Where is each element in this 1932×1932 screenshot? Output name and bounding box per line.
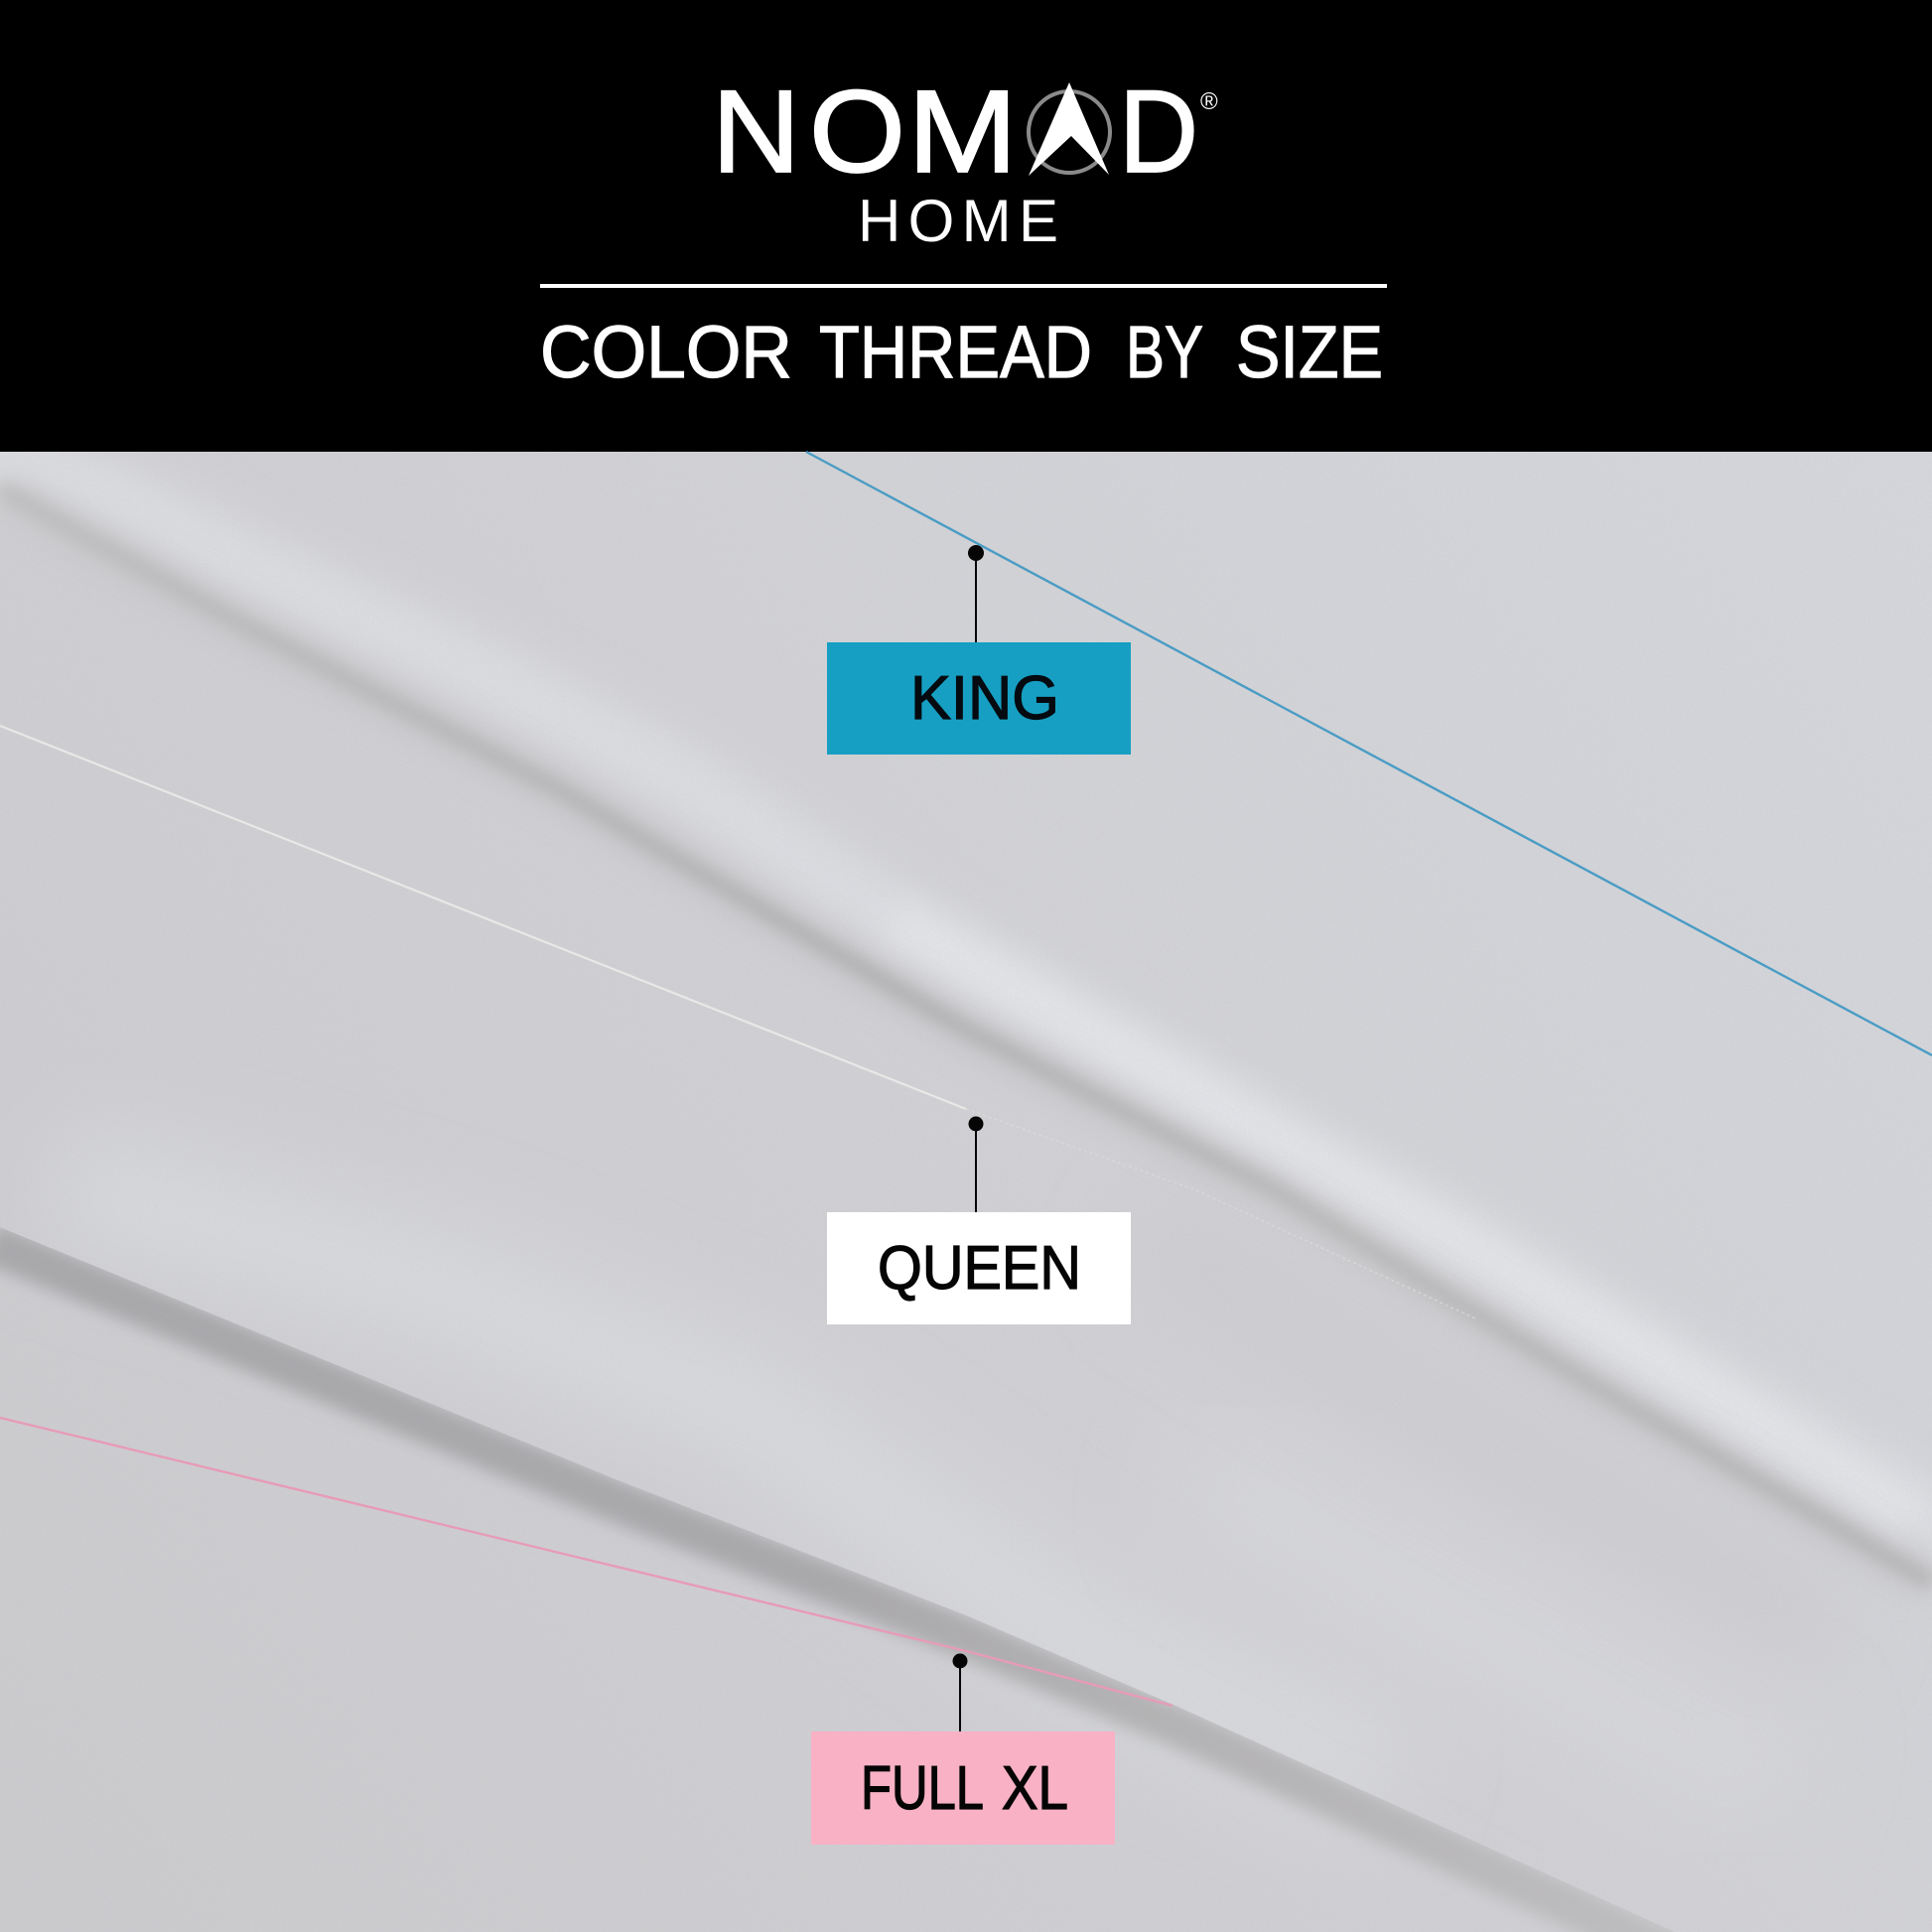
- pin: king: [968, 545, 984, 642]
- title: [540, 311, 1383, 393]
- logo wordmark letters N O M: M: [907, 67, 1018, 198]
- logo wordmark letter D: D: [1119, 67, 1198, 198]
- label box: king: [827, 642, 1131, 755]
- title: COLOR: [540, 311, 792, 393]
- thread: blue king: [806, 452, 1932, 1055]
- callout: full xl: [811, 1654, 1115, 1845]
- title: BY: [1126, 311, 1203, 393]
- callout: king: [827, 545, 1131, 755]
- header band: [0, 0, 1932, 452]
- logo subtitle HOME: HOME: [858, 188, 1058, 254]
- logo wordmark letters N O M: N: [712, 67, 800, 198]
- label text: full xl: XL: [1002, 1754, 1068, 1823]
- fabric photo background: [0, 437, 1932, 1932]
- pin: full xl: [953, 1654, 967, 1731]
- thread: pink full xl: [0, 1418, 1173, 1706]
- label text: full xl: FULL: [861, 1754, 984, 1823]
- pin: queen: [969, 1116, 983, 1212]
- title: SIZE: [1236, 311, 1383, 393]
- logo wordmark letters N O M: O: [809, 67, 905, 198]
- label text: king: KING: [910, 664, 1059, 733]
- title: THREAD: [819, 311, 1092, 393]
- logo wordmark letters N O M: [712, 67, 1018, 198]
- label text: queen: QUEEN: [878, 1234, 1081, 1303]
- logo icon: ring and arrow A: [1029, 82, 1110, 176]
- header divider: [540, 284, 1387, 288]
- logo: Nomad Home: [712, 67, 1218, 254]
- callout: queen: [827, 1116, 1131, 1324]
- thread: white queen: [0, 726, 1477, 1319]
- label box: queen: [827, 1212, 1131, 1324]
- registered mark: ®: [1200, 88, 1218, 115]
- label box: full xl: [811, 1731, 1115, 1845]
